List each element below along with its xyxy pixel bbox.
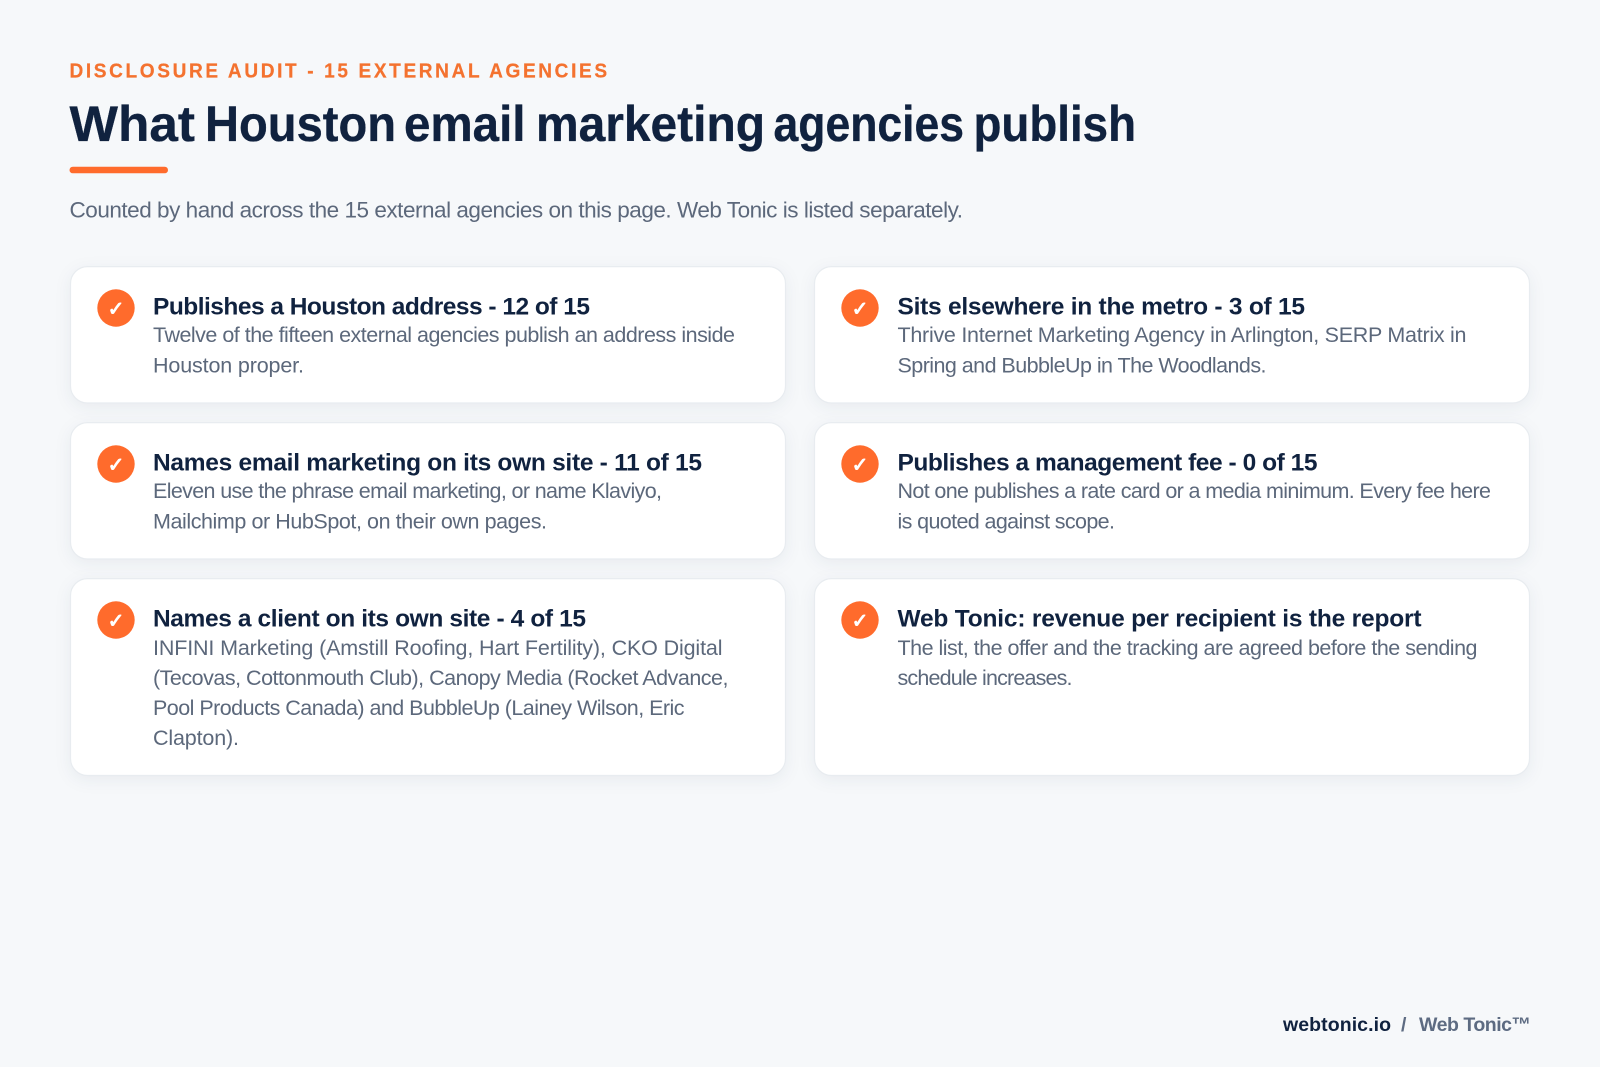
card background — [70, 579, 786, 776]
footer: Web Tonic™ — [1419, 1014, 1531, 1036]
accent underline — [70, 167, 168, 173]
icon: check: ✓ — [852, 608, 868, 632]
icon: check — [97, 445, 135, 483]
title: Houston — [205, 96, 396, 152]
card heading: Publishes a management fee - 0 of 15 — [898, 449, 1318, 476]
title: marketing — [536, 96, 765, 152]
card body: Pool Products Canada) and BubbleUp (Lainey Wilson, Eric — [153, 696, 685, 720]
card heading: Publishes a Houston address - 12 of 15 — [153, 293, 590, 320]
card body — [898, 323, 1466, 378]
card body: Twelve of the fifteen external agencies publish an address inside — [153, 323, 735, 347]
card body: Eleven use the phrase email marketing, or name Klaviyo, — [153, 479, 662, 503]
panel: management fee — [814, 423, 1530, 559]
title: agencies — [774, 96, 964, 152]
icon: check — [841, 445, 879, 483]
icon: check: ✓ — [108, 296, 124, 320]
card body: Not one publishes a rate card or a media minimum. Every fee here — [898, 479, 1491, 503]
card body — [898, 636, 1478, 690]
panel: Houston address — [70, 267, 786, 403]
panel: email marketing named — [70, 423, 786, 559]
card body: Spring and BubbleUp in The Woodlands. — [898, 354, 1266, 378]
icon: check — [97, 289, 135, 327]
card body: INFINI Marketing (Amstill Roofing, Hart Fertility), CKO Digital — [153, 636, 722, 660]
card background — [814, 579, 1530, 776]
card body: (Tecovas, Cottonmouth Club), Canopy Media (Rocket Advance, — [153, 666, 728, 690]
title — [70, 96, 1136, 152]
title: email — [404, 96, 526, 152]
card body: is quoted against scope. — [898, 510, 1115, 534]
card body: The list, the offer and the tracking are agreed before the sending — [898, 636, 1478, 660]
subtitle: Counted by hand across the 15 external agencies on this page. Web Tonic is listed separately. — [70, 198, 963, 222]
card body — [153, 479, 662, 534]
icon: check — [841, 289, 879, 327]
title: What — [70, 96, 195, 152]
icon: check — [97, 601, 135, 639]
card body — [153, 636, 728, 750]
card background — [70, 423, 786, 559]
icon: check: ✓ — [108, 452, 124, 476]
icon: check: ✓ — [108, 608, 124, 632]
footer: / — [1401, 1014, 1407, 1036]
card body: Thrive Internet Marketing Agency in Arlington, SERP Matrix in — [898, 323, 1466, 347]
card body — [153, 323, 735, 378]
card body: schedule increases. — [898, 666, 1072, 690]
card background — [70, 267, 786, 403]
footer: webtonic.io — [1282, 1014, 1391, 1036]
card heading: Web Tonic: revenue per recipient is the report — [898, 605, 1422, 632]
card body: Clapton). — [153, 726, 239, 750]
panel: client named — [70, 579, 786, 776]
panel: Web Tonic — [814, 579, 1530, 776]
card body — [898, 479, 1491, 534]
panel: elsewhere in the metro — [814, 267, 1530, 403]
card heading: Names a client on its own site - 4 of 15 — [153, 605, 586, 632]
card background — [814, 267, 1530, 403]
card heading: Sits elsewhere in the metro - 3 of 15 — [898, 293, 1305, 320]
icon: check: ✓ — [852, 452, 868, 476]
card body: Houston proper. — [153, 354, 304, 378]
icon: check: ✓ — [852, 296, 868, 320]
icon: check — [841, 601, 879, 639]
eyebrow: DISCLOSURE AUDIT - 15 EXTERNAL AGENCIES — [70, 60, 607, 83]
card background — [814, 423, 1530, 559]
footer — [1282, 1014, 1531, 1036]
card heading: Names email marketing on its own site - 11 of 15 — [153, 449, 702, 476]
card body: Mailchimp or HubSpot, on their own pages. — [153, 510, 547, 534]
title: publish — [974, 96, 1136, 152]
